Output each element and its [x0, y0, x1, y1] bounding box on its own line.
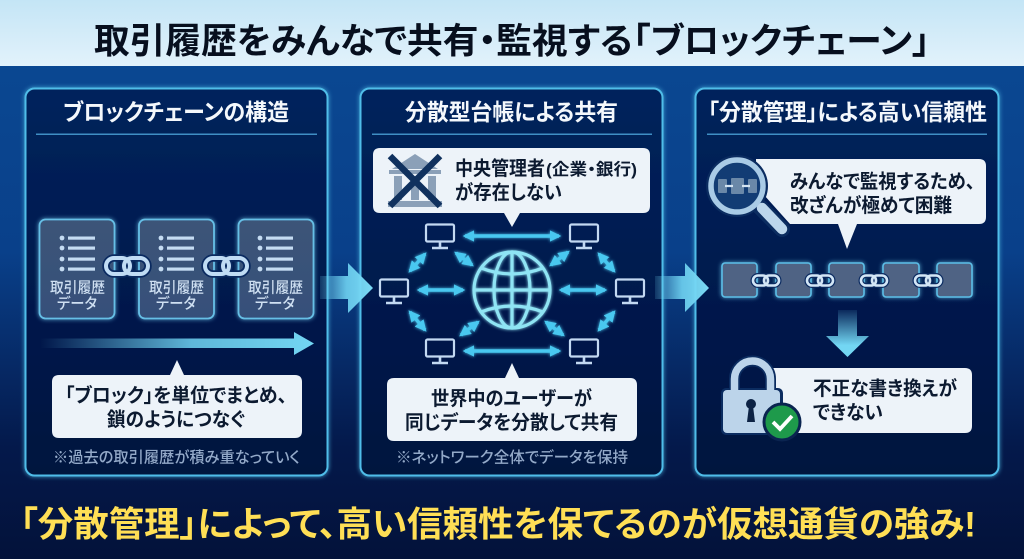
- callout: block unit: [52, 360, 302, 438]
- callout: users share data: 同じデータを分散して共有: [405, 411, 618, 434]
- block 3: データ: [255, 294, 295, 312]
- icon: computers: [380, 224, 644, 363]
- callout: cannot rewrite: できない: [813, 402, 883, 424]
- arrow: time direction: [40, 332, 314, 355]
- block 1: 取引履歴: [50, 280, 105, 296]
- title band: [0, 0, 1024, 66]
- arrow: panel 2 to panel 3: [655, 263, 709, 312]
- callout: no central administrator: [373, 148, 650, 227]
- block 3: [238, 220, 314, 318]
- callout: hard to tamper: 改ざんが極めて困難: [790, 194, 952, 217]
- callout: hard to tamper: みんなで監視するため、: [790, 171, 975, 193]
- callout: cannot rewrite: 不正な書き換えが: [813, 377, 958, 400]
- network diagram: [380, 224, 644, 363]
- arrow: down: [826, 310, 869, 357]
- callout: no central administrator: が存在しない: [455, 181, 562, 204]
- heading: structure: ブロックチェーンの構造: [63, 99, 289, 125]
- heading: reliability: 「分散管理」による高い信頼性: [708, 99, 987, 125]
- conclusion banner: 「分散管理」によって、高い信頼性を保てるのが仮想通貨の強み!: [20, 506, 976, 544]
- block 1: [40, 220, 114, 318]
- panel: blockchain structure: [26, 88, 328, 476]
- callout: hard to tamper: [756, 159, 986, 249]
- icon: chain link 2: [205, 258, 247, 274]
- panel: reliability: [696, 88, 998, 476]
- panel: distributed ledger: [360, 88, 662, 476]
- block 2: データ: [156, 294, 196, 312]
- chain of five blocks: [722, 263, 972, 297]
- icon: magnifier: [706, 155, 782, 229]
- icon: chain link 1: [106, 258, 148, 274]
- arrow: panel 1 to panel 2: [320, 263, 373, 313]
- heading: ledger: 分散型台帳による共有: [405, 99, 618, 125]
- title band: 取引履歴をみんなで共有・監視する「ブロックチェーン」: [94, 21, 930, 61]
- icon: globe: [474, 252, 550, 328]
- callout: cannot rewrite: [770, 368, 972, 433]
- callout: users share data: 世界中のユーザーが: [431, 387, 593, 410]
- block 1: データ: [57, 294, 97, 312]
- block 2: 取引履歴: [149, 280, 204, 296]
- icon: crossed-out bank: [388, 154, 442, 207]
- block 2: [139, 220, 214, 318]
- callout: no central administrator: (企業・銀行): [546, 159, 637, 179]
- arrows: data sharing: [410, 236, 614, 351]
- callout: no central administrator: 中央管理者: [455, 157, 545, 180]
- note: accumulated history: ※過去の取引履歴が積み重なっていく: [53, 448, 300, 466]
- block 3: 取引履歴: [248, 280, 303, 296]
- note: network holds data: ※ネットワーク全体でデータを保持: [396, 448, 628, 466]
- icon: lock with check: [721, 361, 800, 440]
- callout: block unit: 「ブロック」を単位でまとめ、: [65, 384, 287, 407]
- callout: users share data: [387, 363, 637, 441]
- callout: block unit: 鎖のようにつなぐ: [107, 409, 245, 431]
